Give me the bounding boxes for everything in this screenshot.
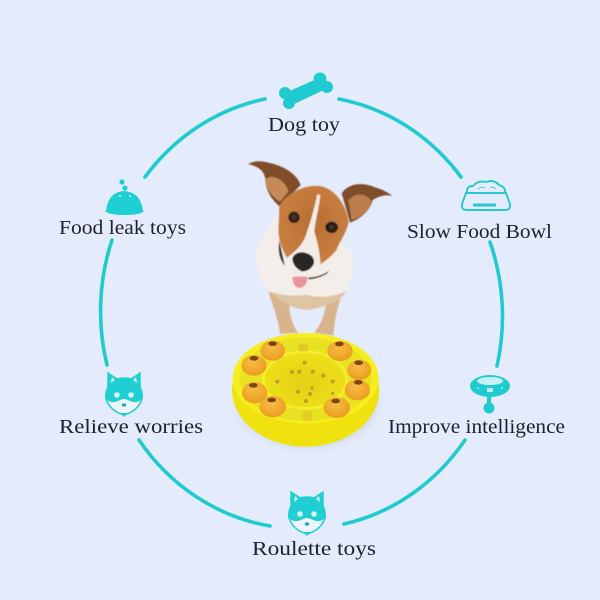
collar <box>279 241 285 266</box>
central well <box>263 352 347 408</box>
body <box>257 213 354 310</box>
bowl shadow <box>237 358 377 448</box>
bowl outer body <box>232 333 379 447</box>
bowl inner ledge <box>240 337 372 421</box>
icon: bone <box>279 72 333 109</box>
label: Relieve worries: Relieve worries <box>59 416 203 438</box>
label: Roulette toys: Roulette toys <box>252 538 376 560</box>
kibble holes <box>275 361 335 403</box>
head <box>278 186 349 267</box>
label: Dog toy: Dog toy <box>268 114 341 136</box>
illustration: yellow puzzle bowl <box>232 333 379 448</box>
eyes <box>288 212 300 223</box>
icon: slow food bowl <box>462 181 510 210</box>
icon: shiba head left <box>106 373 142 417</box>
belly shading <box>270 292 346 310</box>
bowl rim top <box>233 333 379 424</box>
ledge slots <box>299 343 308 351</box>
nose <box>292 252 314 271</box>
icon: collar with tag <box>470 375 510 414</box>
icon: shiba head bottom <box>289 492 325 536</box>
tongue <box>293 277 307 288</box>
illustration: dog <box>248 161 393 335</box>
left ear <box>248 161 301 207</box>
ring of arc connectors <box>101 99 502 526</box>
icon: food dispenser bowl <box>106 179 144 215</box>
label: Food leak toys: Food leak toys <box>59 217 186 239</box>
label: Improve intelligence: Improve intelligence <box>388 416 565 438</box>
treat nubs <box>241 341 371 418</box>
legs <box>268 292 298 334</box>
white blaze and muzzle <box>287 194 321 277</box>
right ear <box>342 184 393 223</box>
label: Slow Food Bowl: Slow Food Bowl <box>407 221 552 243</box>
